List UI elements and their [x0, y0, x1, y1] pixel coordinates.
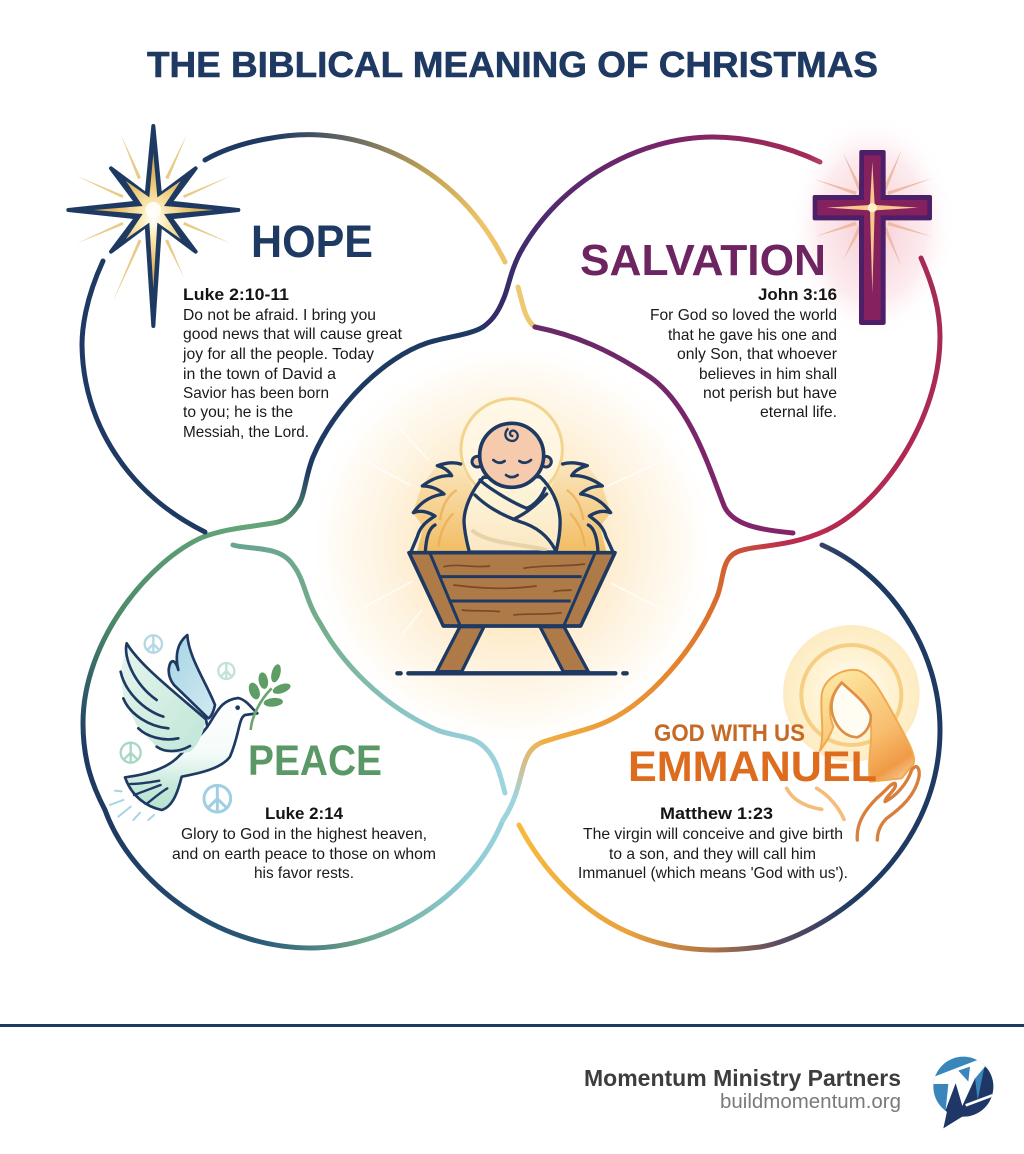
verse: Matthew 1:23: Matthew 1:23 — [660, 805, 773, 823]
logo tail — [943, 1108, 963, 1128]
verse: Matthew 1:23: Immanuel (which means 'God with us'). — [578, 865, 848, 882]
baby head — [472, 456, 483, 467]
icon: dove — [110, 635, 292, 820]
icon: momentum logo — [933, 1056, 994, 1128]
verse: Luke 2:10-11: Do not be afraid. I bring you — [183, 307, 376, 324]
outline: salvation right arc — [827, 258, 940, 530]
verse: John 3:16: For God so loved the world — [650, 307, 837, 324]
panel: peace — [110, 635, 436, 882]
verse: Matthew 1:23: The virgin will conceive and give birth — [583, 826, 843, 843]
verse: Luke 2:14: Luke 2:14 — [265, 805, 344, 823]
verse: John 3:16: not perish but have — [703, 385, 837, 402]
verse: John 3:16: only Son, that whoever — [677, 346, 838, 363]
swaddled body — [464, 477, 560, 552]
body and tail — [125, 698, 257, 810]
verse: Matthew 1:23: to a son, and they will call him — [609, 846, 816, 863]
verse: Luke 2:14: his favor rests. — [254, 865, 354, 882]
verse: Luke 2:10-11: in the town of David a — [183, 366, 336, 383]
halo rings — [783, 625, 920, 762]
eye — [235, 705, 240, 710]
verse: John 3:16 — [650, 286, 838, 421]
big wing — [121, 643, 206, 753]
manger box — [409, 553, 615, 626]
veil — [820, 670, 914, 782]
interlocking circle outlines — [82, 135, 940, 950]
light rays — [363, 425, 657, 633]
verse: Luke 2:10-11: to you; he is the — [183, 404, 293, 421]
face — [831, 683, 871, 737]
verse: Matthew 1:23 — [578, 805, 848, 882]
panel: hope — [68, 126, 403, 441]
verse: Luke 2:14: Glory to God in the highest heaven, — [181, 826, 427, 843]
back wing — [169, 635, 215, 718]
icon: cross — [789, 113, 956, 340]
verse: Luke 2:10-11: Savior has been born — [183, 385, 329, 402]
motion lines — [110, 791, 154, 820]
panel: salvation — [580, 113, 956, 530]
footer: organisation name — [584, 1065, 901, 1113]
heading: salvation: SALVATION — [580, 236, 826, 285]
footer: organisation name: Momentum Ministry Partners — [584, 1065, 901, 1091]
footer: organisation name: buildmomentum.org — [720, 1091, 901, 1113]
icon: mary figure — [783, 625, 920, 840]
heading: peace: PEACE — [248, 737, 382, 785]
verse: Luke 2:10-11: Messiah, the Lord. — [183, 424, 309, 441]
verse: Luke 2:10-11: joy for all the people. Today — [182, 346, 374, 363]
center glow — [307, 340, 717, 750]
verse: John 3:16: believes in him shall — [699, 366, 837, 383]
hay right — [550, 463, 613, 553]
title: THE BIBLICAL MEANING OF CHRISTMAS — [147, 44, 878, 85]
verse: Luke 2:14: and on earth peace to those on whom — [172, 846, 436, 863]
heading: god with us: GOD WITH US — [654, 720, 805, 747]
heading: emmanuel: EMMANUEL — [628, 743, 877, 791]
olive branch — [247, 663, 292, 730]
footer rule — [0, 1024, 1024, 1027]
verse: Luke 2:10-11: good news that will cause great — [183, 326, 403, 343]
verse: John 3:16: that he gave his one and — [668, 327, 837, 344]
icon: star — [68, 126, 238, 326]
heading: hope: HOPE — [251, 216, 373, 267]
icon: baby in manger — [363, 399, 657, 673]
verse: Luke 2:10-11 — [182, 286, 403, 441]
verse: Luke 2:10-11: Luke 2:10-11 — [183, 286, 289, 304]
verse: John 3:16: eternal life. — [760, 404, 837, 421]
hay left — [411, 463, 473, 553]
peace symbols — [121, 635, 234, 812]
manger legs — [437, 627, 484, 672]
panel: emmanuel — [578, 625, 920, 882]
ground line — [397, 667, 627, 680]
hands — [857, 767, 919, 840]
halo — [461, 399, 562, 500]
verse: Luke 2:14 — [172, 805, 436, 882]
verse: John 3:16: John 3:16 — [758, 286, 837, 304]
